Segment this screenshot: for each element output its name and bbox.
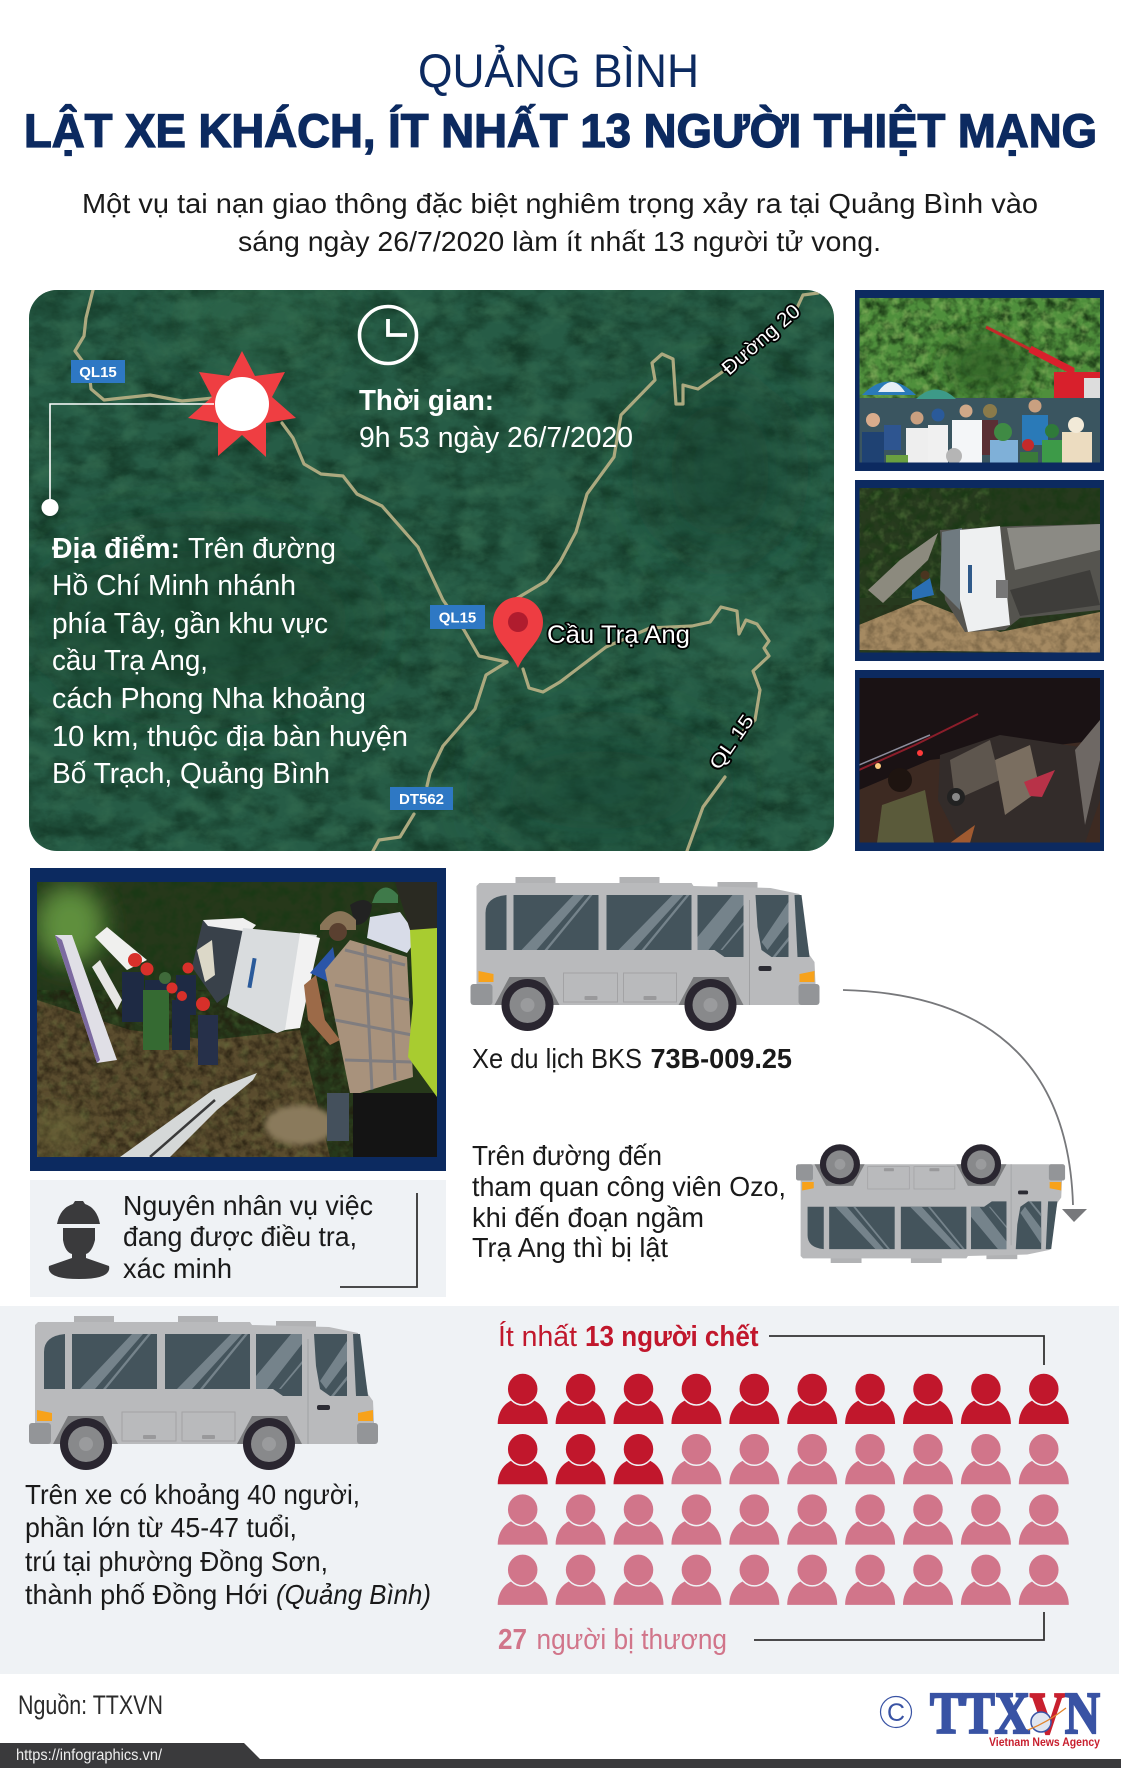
injured heading: 27 [498, 1624, 527, 1656]
source: Nguồn: TTXVN [18, 1690, 163, 1720]
icon: worker [49, 1201, 109, 1279]
road label DT562 [390, 787, 453, 810]
road label QL15 top [71, 360, 125, 383]
footer bar: https://infographics.vn/ [16, 1747, 162, 1764]
passengers text: (Quảng Bình) [276, 1579, 431, 1610]
photo: overturned bus daylight [855, 480, 1104, 661]
location text: Địa điểm: [52, 533, 180, 565]
note text: đang được điều tra, [123, 1221, 357, 1252]
time text [359, 385, 633, 454]
location text: Hồ Chí Minh nhánh [52, 570, 296, 602]
accident description text [472, 1140, 786, 1263]
location text: phía Tây, gần khu vực [52, 608, 328, 640]
accident description text: Trên đường đến [472, 1140, 662, 1171]
title: location: QUẢNG BÌNH [418, 44, 699, 97]
road label QL15 top: QL15 [79, 364, 117, 381]
pictogram: 40 people, 13 dead and 27 injured [498, 1373, 1069, 1605]
road label QL 15: QL 15 [706, 711, 759, 774]
location text: cách Phong Nha khoảng [52, 683, 366, 715]
bus registration text: Xe du lịch BKS [472, 1043, 642, 1074]
illustration: bus passengers [29, 1316, 378, 1470]
photo: wrecked vehicle at night [855, 670, 1104, 851]
logo: TTXVN: C [887, 1699, 905, 1727]
deaths heading: Ít nhất [498, 1320, 577, 1353]
roads [75, 290, 818, 851]
passengers text: phần lớn từ 45-47 tuổi, [25, 1512, 297, 1543]
location text [52, 533, 408, 790]
deaths heading: 13 người chết [585, 1321, 759, 1353]
title: headline: LẬT XE KHÁCH, ÍT NHẤT 13 NGƯỜI THIỆT MẠNG [24, 104, 1097, 157]
time text: 9h 53 ngày 26/7/2020 [359, 422, 633, 454]
footer bar [0, 1743, 1121, 1768]
illustration: bus upright [470, 877, 820, 1031]
note text [123, 1190, 373, 1284]
intro text: sáng ngày 26/7/2020 làm ít nhất 13 người tử vong. [238, 226, 881, 257]
road label QL15 centre [430, 605, 485, 629]
logo: TTXVN: TTXVN [930, 1680, 1100, 1746]
location text: cầu Trạ Ang, [52, 645, 208, 677]
note text: Nguyên nhân vụ việc [123, 1190, 373, 1221]
injured heading: người bị thương [536, 1624, 727, 1656]
passengers text: thành phố Đồng Hới [25, 1579, 268, 1610]
intro text: Một vụ tai nạn giao thông đặc biệt nghiêm trọng xảy ra tại Quảng Bình vào [82, 188, 1038, 219]
passengers text [25, 1479, 431, 1610]
accident description text: tham quan công viên Ozo, [472, 1171, 786, 1202]
bus registration text: 73B-009.25 [650, 1043, 792, 1074]
accident description text: khi đến đoạn ngầm [472, 1202, 704, 1233]
deaths heading [498, 1320, 1044, 1365]
illustration: bus overturned [796, 1144, 1065, 1263]
icon: map pin [493, 597, 543, 668]
logo: TTXVN: Vietnam News Agency [989, 1735, 1100, 1749]
injured heading [498, 1612, 1044, 1656]
panel: investigation note [30, 1180, 446, 1297]
intro text [82, 188, 1038, 257]
photo: crowd and crane [855, 290, 1104, 471]
time text: Thời gian: [359, 385, 494, 417]
panel: casualties [0, 1306, 1119, 1674]
accident description text: Trạ Ang thì bị lật [472, 1232, 668, 1263]
bus registration text [472, 1043, 792, 1074]
panel: satellite map [29, 280, 834, 851]
road label DT562: DT562 [399, 791, 444, 808]
passengers text: Trên xe có khoảng 40 người, [25, 1479, 360, 1510]
place label: Cầu Trạ Ang [547, 621, 690, 649]
note text: xác minh [123, 1253, 232, 1284]
passengers text: trú tại phường Đồng Sơn, [25, 1546, 328, 1577]
road label QL15 centre: QL15 [439, 610, 476, 626]
photo: rescue scene [30, 868, 446, 1171]
location text: 10 km, thuộc địa bàn huyện [52, 721, 408, 753]
location text: Bố Trạch, Quảng Bình [52, 758, 330, 790]
icon: clock [360, 306, 416, 364]
location text: Trên đường [188, 533, 336, 565]
accident marker: red star [188, 351, 296, 457]
road label Đường 20: Đường 20 [718, 300, 805, 380]
arrow: bus overturned [843, 990, 1087, 1222]
leader line [42, 404, 214, 516]
